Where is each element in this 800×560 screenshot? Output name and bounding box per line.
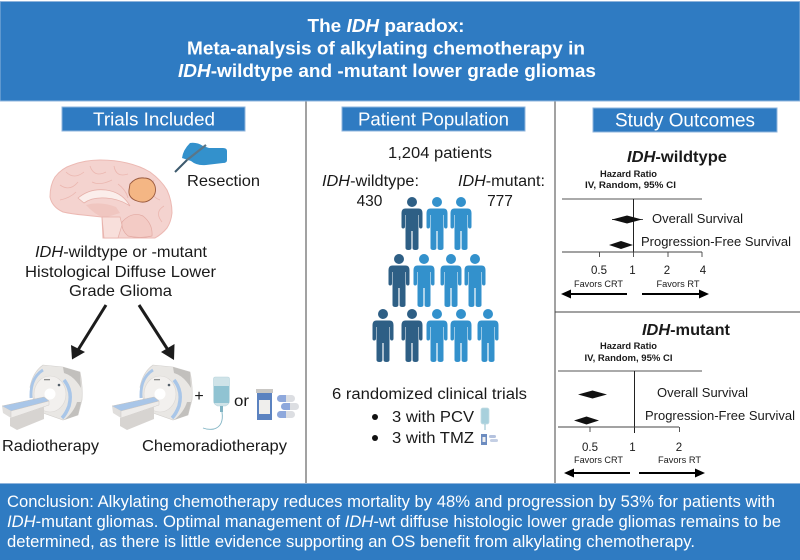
text: trial counts: 6 randomized clinical trials <box>332 386 527 403</box>
forest plot: IDH-wildtype: 2 <box>664 265 670 277</box>
text: mutant count: IDH-mutant: <box>458 173 545 190</box>
forest plot: IDH-mutant: Hazard Ratio <box>600 341 658 351</box>
conclusion banner <box>0 483 800 560</box>
panel dividers <box>306 100 800 485</box>
forest plot: IDH-wildtype: Progression-Free Survival <box>641 235 791 249</box>
forest plot: IDH-wildtype: IDH-wildtype <box>627 149 727 166</box>
label: radiotherapy: Radiotherapy <box>2 438 99 455</box>
heading: study outcomes: Study Outcomes <box>615 110 755 132</box>
conclusion banner: IDH-mutant gliomas. Optimal management of IDH-wt diffuse histologic lower grade gliomas remains to be <box>7 512 781 531</box>
title banner: Meta-analysis of alkylating chemotherapy in <box>187 38 585 58</box>
text: eligibility: Histological Diffuse Lower <box>25 264 217 281</box>
text: trial counts <box>332 386 527 447</box>
forest plot: IDH-mutant <box>558 322 795 478</box>
text: wildtype count: IDH-wildtype: <box>322 173 419 190</box>
forest plot: IDH-mutant: Favors CRT <box>574 455 624 465</box>
panel: patient population <box>322 107 545 447</box>
forest plot: IDH-mutant: Favors RT <box>658 455 702 465</box>
icon: small iv bag <box>481 408 489 430</box>
forest plot: IDH-wildtype: 4 <box>700 265 707 277</box>
forest plot: IDH-mutant: Overall Survival <box>657 386 748 400</box>
icon: radiotherapy machine <box>2 365 82 430</box>
icon: pill bottle and pills <box>256 389 299 420</box>
panel: trials included <box>2 107 299 455</box>
panel: study outcomes <box>558 108 795 478</box>
text: mutant count: 777 <box>487 193 513 210</box>
diamond: progression-free survival <box>574 416 599 424</box>
forest plot: IDH-mutant: 1 <box>629 442 636 454</box>
icon: brain with tumor <box>50 160 172 238</box>
text: eligibility <box>25 244 217 300</box>
title banner: The IDH paradox: <box>308 15 464 36</box>
label: resection: Resection <box>187 173 260 190</box>
arrow: to chemoradiotherapy <box>139 305 174 360</box>
arrow: favors RT <box>639 468 705 478</box>
text: wildtype count <box>322 173 419 210</box>
diamond: overall survival <box>578 390 607 398</box>
title banner: IDH-wildtype and -mutant lower grade gliomas <box>178 60 596 81</box>
arrow: favors CRT <box>564 468 630 478</box>
text: trial counts: 3 with TMZ <box>392 430 474 447</box>
forest plot: IDH-mutant: IDH-mutant <box>642 322 730 339</box>
conclusion banner: determined, as there is little evidence supporting an OS benefit from alkylating chemotherapy. <box>7 532 695 551</box>
text: total patients: 1,204 patients <box>388 145 492 162</box>
text: eligibility: Grade Glioma <box>69 283 172 300</box>
diamond: overall survival <box>612 216 643 224</box>
forest plot: IDH-mutant: Progression-Free Survival <box>645 409 795 423</box>
forest plot: IDH-mutant: IV, Random, 95% CI <box>584 353 672 363</box>
text: trial counts: 3 with PCV <box>392 409 475 426</box>
icon: small pills <box>481 434 498 445</box>
text: wildtype count: 430 <box>357 193 383 210</box>
forest plot: IDH-wildtype: Favors CRT <box>574 279 624 289</box>
arrow: favors RT <box>642 290 709 298</box>
text: mutant count <box>458 173 545 210</box>
forest plot: IDH-mutant: 2 <box>676 442 682 454</box>
heading: study outcomes <box>593 108 777 132</box>
conclusion banner: Conclusion: Alkylating chemotherapy reduces mortality by 48% and progression by 53% for patients with <box>7 492 775 511</box>
arrow: to radiotherapy <box>71 305 106 360</box>
heading: trials included: Trials Included <box>93 108 215 130</box>
forest plot: IDH-wildtype: Hazard Ratio <box>600 169 658 179</box>
diamond: progression-free survival <box>609 241 633 249</box>
forest plot: IDH-wildtype: IV, Random, 95% CI <box>585 180 676 190</box>
icon: chemoradiotherapy machine <box>112 365 192 430</box>
text: eligibility: IDH-wildtype or -mutant <box>35 244 208 261</box>
forest plot: IDH-wildtype: 1 <box>629 265 636 277</box>
forest plot: IDH-wildtype: 0.5 <box>591 265 607 277</box>
label: or: or <box>234 393 250 410</box>
label: plus: + <box>194 388 204 405</box>
forest plot: IDH-wildtype <box>561 149 791 298</box>
heading: patient population: Patient Population <box>358 108 509 130</box>
pictogram: patients <box>372 197 499 362</box>
icon: hand with scalpel <box>175 143 227 172</box>
arrow: favors CRT <box>561 290 627 298</box>
forest plot: IDH-mutant: 0.5 <box>582 442 598 454</box>
forest plot: IDH-wildtype: Favors RT <box>656 279 700 289</box>
title banner <box>0 2 800 101</box>
icon: iv bag <box>203 377 230 429</box>
heading: trials included <box>62 107 245 131</box>
label: chemoradiotherapy: Chemoradiotherapy <box>142 438 287 455</box>
forest plot: IDH-wildtype: Overall Survival <box>652 212 743 226</box>
